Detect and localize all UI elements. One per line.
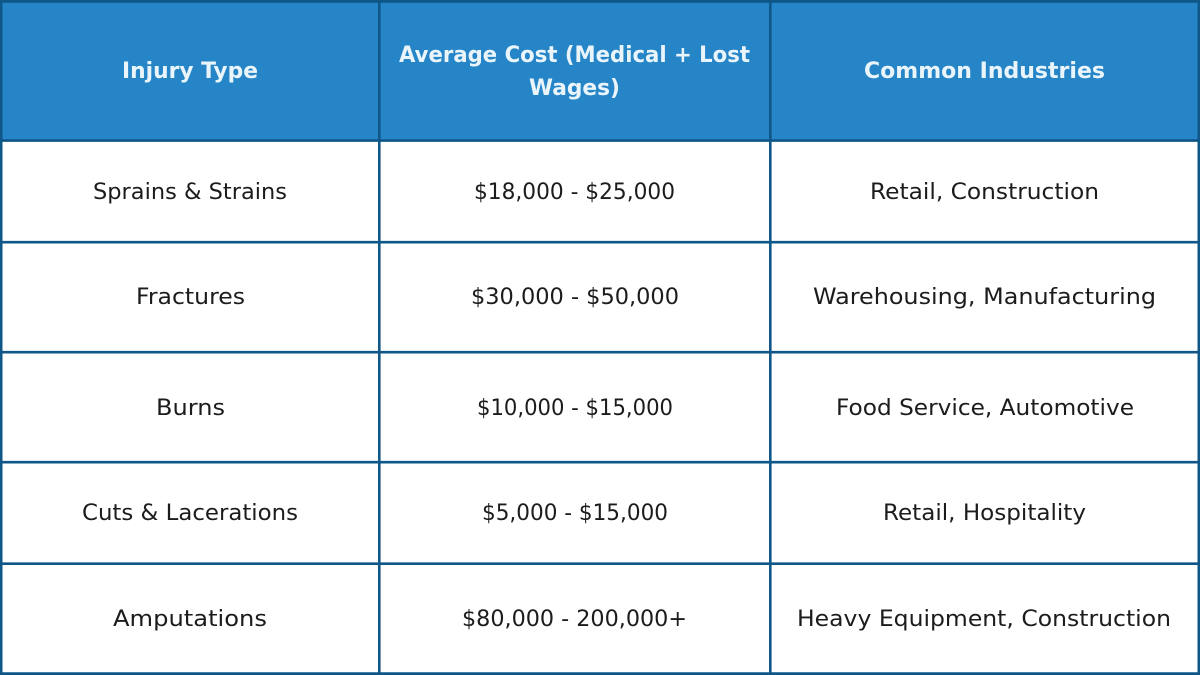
- header: Average Cost: Average Cost (Medical + Lost: [399, 43, 750, 68]
- row: Cuts & Lacerations: Retail, Hospitality: [883, 500, 1086, 526]
- header: Injury Type: Injury Type: [122, 59, 258, 84]
- header: Average Cost: [399, 43, 750, 101]
- row: Fractures: $30,000 - $50,000: [471, 284, 679, 310]
- row: Sprains & Strains: $18,000 - $25,000: [474, 179, 675, 205]
- row: Amputations: [113, 606, 1171, 632]
- row: Amputations: $80,000 - 200,000+: [462, 606, 687, 632]
- row: Amputations: Amputations: [113, 606, 267, 632]
- row: Burns: Burns: [156, 395, 225, 421]
- row: Sprains & Strains: Retail, Construction: [870, 179, 1099, 205]
- header: Common Industries: Common Industries: [864, 59, 1105, 84]
- row: Fractures: Warehousing, Manufacturing: [813, 284, 1156, 310]
- header row background: [0, 0, 1200, 140]
- row: Cuts & Lacerations: Cuts & Lacerations: [82, 500, 298, 526]
- row: Burns: [156, 395, 1134, 421]
- header: Average Cost: Wages): [529, 76, 620, 101]
- row: Burns: Food Service, Automotive: [836, 395, 1134, 421]
- row: Cuts & Lacerations: [82, 500, 1086, 526]
- row: Fractures: Fractures: [136, 284, 245, 310]
- row: Amputations: Heavy Equipment, Construction: [797, 606, 1171, 632]
- row: Sprains & Strains: Sprains & Strains: [93, 179, 287, 205]
- row: Fractures: [136, 284, 1156, 310]
- row: Cuts & Lacerations: $5,000 - $15,000: [482, 500, 668, 526]
- row: Sprains & Strains: [93, 179, 1099, 205]
- row: Burns: $10,000 - $15,000: [477, 395, 673, 421]
- header row: [122, 43, 1105, 101]
